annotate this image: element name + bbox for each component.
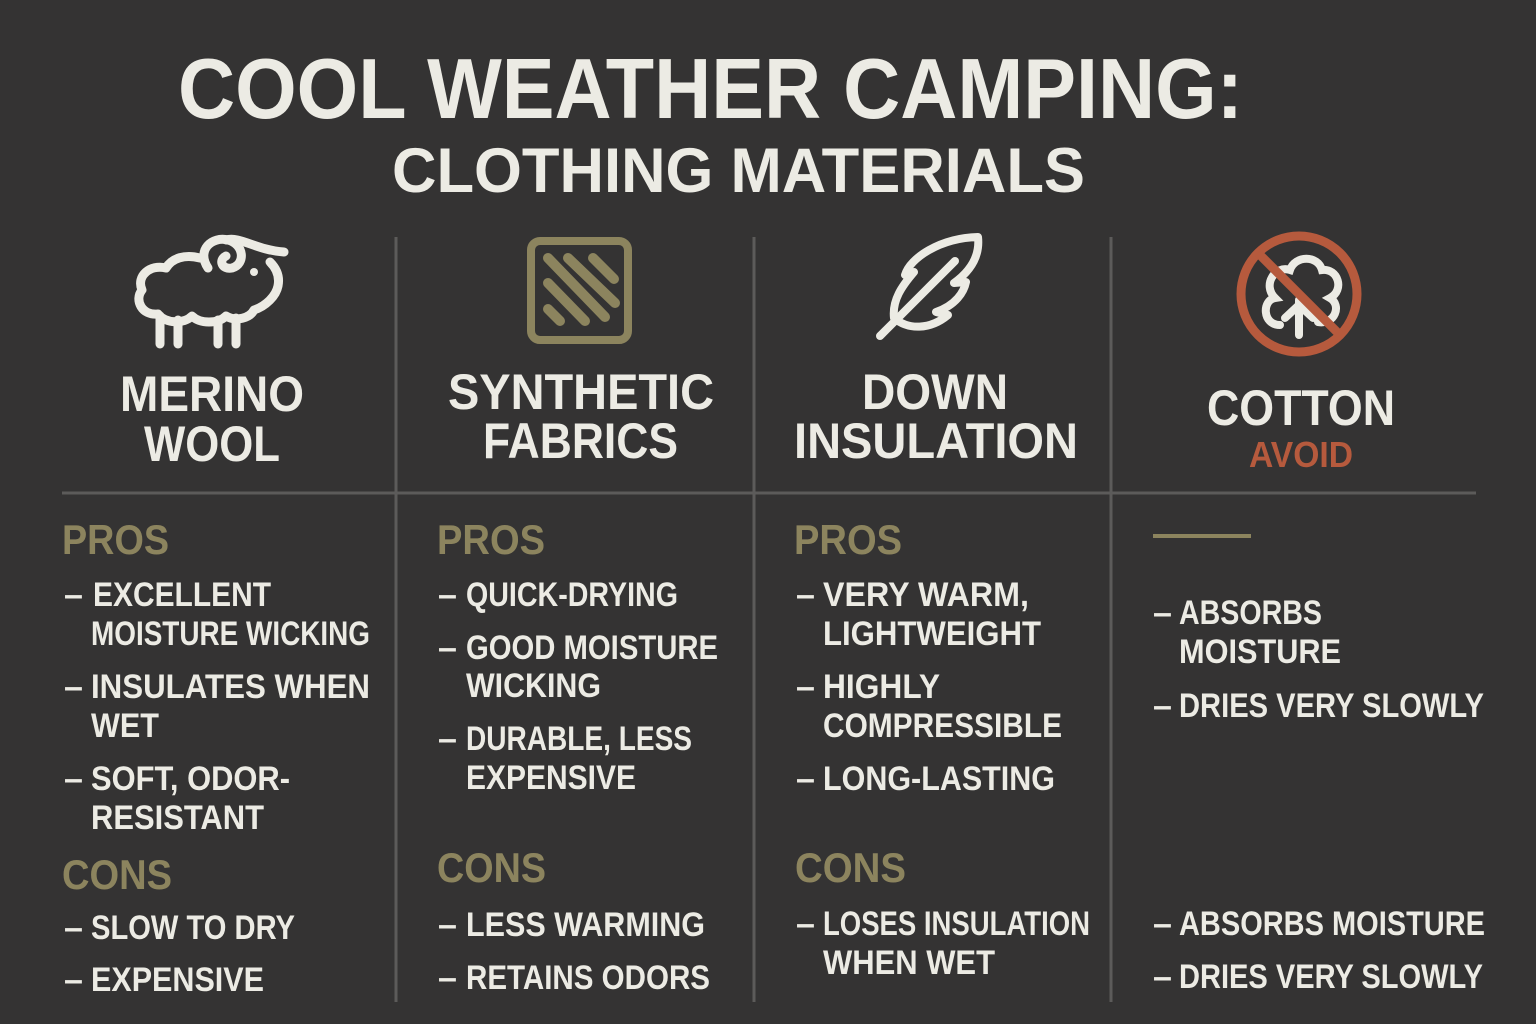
panel: merino wool list: –	[64, 668, 83, 706]
panel: merino wool list: WET	[91, 707, 159, 745]
panel: down list: –	[796, 668, 815, 706]
panel: cotton list: –	[1153, 958, 1172, 996]
panel: down list: CONS	[795, 844, 906, 891]
panel: merino wool list: INSULATES WHEN	[91, 668, 370, 706]
panel: merino wool list: CONS	[62, 851, 172, 898]
panel: synthetic list: –	[438, 576, 457, 614]
panel: merino wool list: PROS	[62, 516, 169, 563]
panel: merino wool list: RESISTANT	[91, 799, 264, 837]
panel: synthetic list: CONS	[437, 844, 546, 891]
panel: synthetic list: –	[438, 959, 457, 997]
panel: merino wool list: –	[64, 576, 83, 614]
panel: down list: LONG-LASTING	[823, 760, 1055, 798]
panel: down list: LOSES INSULATION	[823, 905, 1090, 943]
heading: down insulation: INSULATION	[794, 413, 1078, 469]
heading: synthetic fabrics	[448, 364, 714, 469]
panel: cotton list	[1153, 534, 1485, 996]
panel: synthetic list: RETAINS ODORS	[466, 959, 710, 997]
panel: synthetic list: LESS WARMING	[466, 906, 705, 944]
panel: synthetic list: –	[438, 629, 457, 667]
panel: synthetic list: DURABLE, LESS	[466, 720, 692, 758]
panel: merino wool list	[62, 516, 370, 999]
panel: down list: –	[796, 760, 815, 798]
panel: synthetic list: WICKING	[466, 667, 601, 705]
panel: down list: VERY WARM,	[823, 576, 1029, 614]
panel: merino wool list: SLOW TO DRY	[91, 909, 295, 947]
panel: cotton list: –	[1153, 687, 1172, 725]
panel: merino wool list: SOFT, ODOR-	[91, 760, 290, 798]
panel: cotton list: MOISTURE	[1179, 633, 1341, 671]
heading: merino wool	[120, 366, 304, 472]
panel: down list: HIGHLY	[823, 668, 940, 706]
heading: synthetic fabrics: FABRICS	[483, 413, 678, 469]
panel: down list	[794, 516, 1090, 982]
panel: cotton list: ABSORBS	[1179, 594, 1322, 632]
panel: merino wool list: –	[64, 909, 83, 947]
title: COOL WEATHER CAMPING:	[178, 42, 1243, 137]
panel: merino wool list: EXCELLENT	[93, 576, 271, 614]
panel: down list: COMPRESSIBLE	[823, 707, 1062, 745]
icon: feather	[880, 237, 978, 336]
panel: down list: WHEN WET	[823, 944, 995, 982]
panel: merino wool list: EXPENSIVE	[91, 961, 264, 999]
heading: merino wool: WOOL	[144, 416, 280, 472]
heading: cotton avoid: COTTON	[1207, 380, 1395, 436]
title	[178, 42, 1243, 206]
icon: no cotton	[1241, 236, 1357, 352]
panel: down list: –	[796, 905, 815, 943]
panel: synthetic list: GOOD MOISTURE	[466, 629, 718, 667]
panel: synthetic list: –	[438, 906, 457, 944]
icon: synthetic fabric	[531, 241, 628, 340]
heading: cotton avoid	[1207, 380, 1395, 475]
panel: cotton list: –	[1153, 594, 1172, 632]
panel: synthetic list: EXPENSIVE	[466, 759, 636, 797]
heading: down insulation	[794, 364, 1078, 469]
heading: merino wool: MERINO	[120, 366, 304, 422]
panel: synthetic list: PROS	[437, 516, 545, 563]
heading: down insulation: DOWN	[862, 364, 1008, 420]
panel: cotton list: ABSORBS MOISTURE	[1179, 905, 1485, 943]
heading: cotton avoid: AVOID	[1249, 434, 1353, 475]
panel: cotton list: –	[1153, 905, 1172, 943]
panel: down list: –	[796, 576, 815, 614]
panel: cotton list: DRIES VERY SLOWLY	[1179, 687, 1484, 725]
panel: cotton list: DRIES VERY SLOWLY	[1179, 958, 1483, 996]
heading: synthetic fabrics: SYNTHETIC	[448, 364, 714, 420]
title: CLOTHING MATERIALS	[392, 136, 1085, 206]
panel: down list: LIGHTWEIGHT	[823, 615, 1041, 653]
panel: synthetic list: QUICK-DRYING	[466, 576, 678, 614]
panel: merino wool list: –	[64, 961, 83, 999]
panel: synthetic list	[437, 516, 718, 997]
panel: synthetic list: –	[438, 720, 457, 758]
icon: sheep	[139, 239, 284, 344]
panel: merino wool list: MOISTURE WICKING	[91, 615, 370, 653]
panel: down list: PROS	[794, 516, 902, 563]
panel: merino wool list: –	[64, 760, 83, 798]
